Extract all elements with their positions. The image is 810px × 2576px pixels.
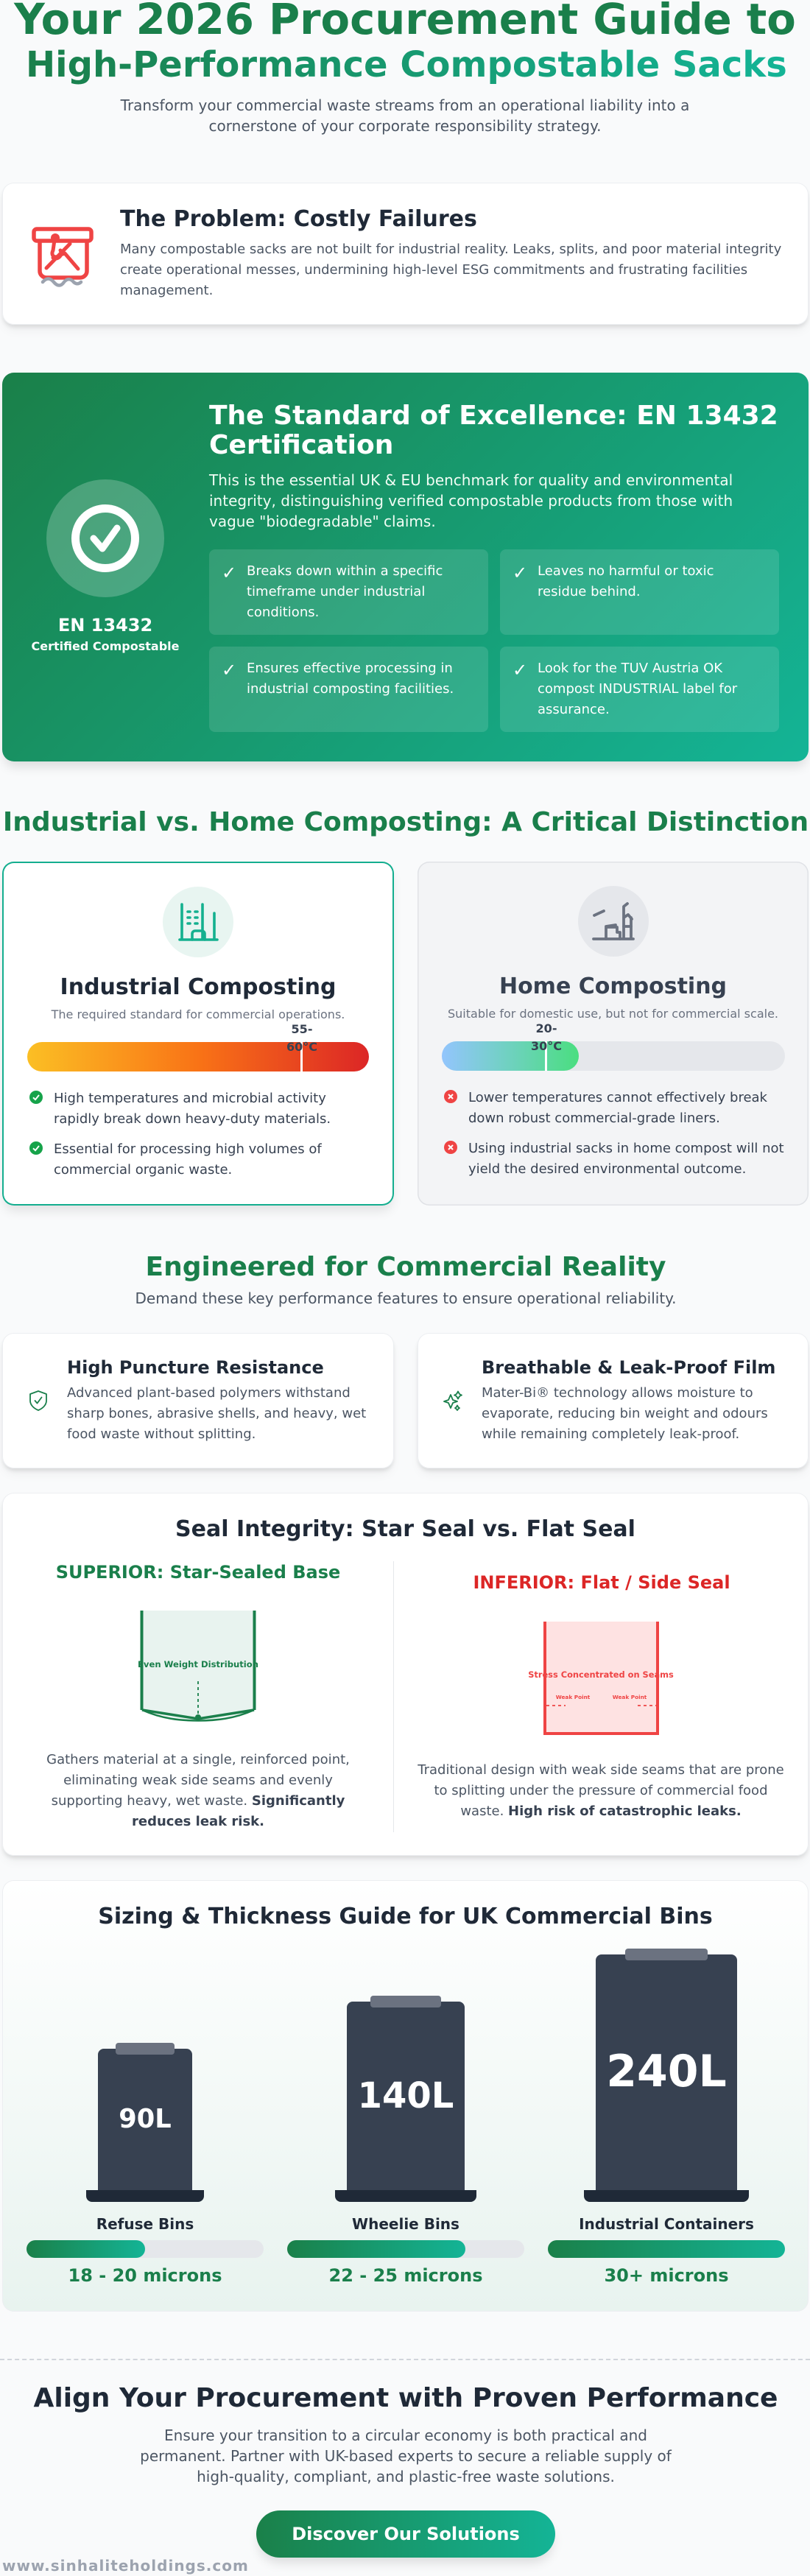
closing text: permanent. Partner with UK-based experts to secure a reliable supply of	[140, 2447, 672, 2465]
heading	[209, 401, 778, 460]
benefit 2: Leaves no harmful or toxic	[538, 563, 714, 579]
benefit 1: ✓	[222, 563, 236, 583]
volume: 140L	[358, 2075, 454, 2116]
column: 90L	[27, 2043, 264, 2286]
closing text	[140, 2427, 672, 2485]
benefit 3: Ensures effective processing in	[247, 661, 453, 676]
thickness bar	[548, 2240, 785, 2258]
thickness bar	[27, 2240, 264, 2258]
benefit 3: industrial composting facilities.	[247, 681, 454, 697]
call to action button: Discover Our Solutions	[292, 2524, 520, 2544]
temperature label: 20-	[536, 1021, 557, 1035]
icon: check	[29, 1091, 43, 1104]
diagram: star-sealed bag: Even Weight Distribution	[138, 1659, 258, 1669]
diagram: flat-sealed bag: Stress Concentrated on Seams	[528, 1669, 674, 1680]
icon: industrial building	[163, 887, 233, 957]
bin body	[347, 2002, 465, 2196]
bin body	[98, 2049, 192, 2196]
icon: check	[29, 1141, 43, 1155]
body text: evaporate, reducing bin weight and odours	[482, 1406, 768, 1421]
superior description	[46, 1752, 350, 1829]
benefit 1	[209, 549, 488, 635]
diagram: flat-sealed bag	[528, 1622, 674, 1735]
benefit 4: assurance.	[538, 702, 610, 717]
diagram: flat-sealed bag: Weak Point	[556, 1694, 591, 1700]
column: 140L	[287, 1996, 524, 2286]
inferior description: to splitting under the pressure of commercial food	[434, 1783, 767, 1798]
heading: The Problem: Costly Failures	[120, 206, 477, 232]
panel: home composting	[418, 862, 809, 1206]
inferior description: waste. High risk of catastrophic leaks.	[460, 1803, 742, 1819]
bin type: Refuse Bins	[96, 2215, 194, 2233]
benefit 2: ✓	[513, 563, 527, 583]
point 2: commercial organic waste.	[54, 1162, 232, 1178]
heading: Industrial Composting	[60, 974, 336, 1000]
panel: breathable film	[418, 1333, 809, 1468]
icon: sparkles	[443, 1390, 462, 1411]
heading: Certification	[209, 430, 393, 460]
bin base	[584, 2190, 749, 2202]
closing text: high-quality, compliant, and plastic-free waste solutions.	[197, 2468, 615, 2485]
body text: create operational messes, undermining high-level ESG commitments and frustrating facilities	[120, 262, 747, 278]
header	[13, 0, 796, 135]
bin lid	[116, 2043, 175, 2055]
point 2: yield the desired environmental outcome.	[468, 1161, 746, 1177]
benefit 1: Breaks down within a specific	[247, 563, 443, 579]
heading: Home Composting	[499, 974, 727, 999]
icon: certified badge	[46, 479, 164, 597]
title line 2: High-Performance Compostable Sacks	[26, 44, 787, 85]
bin base	[86, 2190, 204, 2202]
benefit 4: ✓	[513, 660, 527, 680]
point 2	[54, 1141, 323, 1178]
body text	[67, 1385, 366, 1442]
temperature label	[531, 1021, 562, 1053]
section subheading: Demand these key performance features to ensure operational reliability.	[135, 1289, 677, 1307]
point 1: down robust commercial-grade liners.	[468, 1111, 720, 1126]
description: integrity, distinguishing verified compostable products from those with	[209, 492, 733, 510]
diagram: star-sealed bag	[138, 1611, 258, 1722]
divider	[393, 1561, 394, 1832]
title: High Puncture Resistance	[67, 1357, 324, 1378]
temperature marker	[545, 1041, 547, 1071]
bin lid	[370, 1996, 441, 2007]
microns: 30+ microns	[604, 2265, 729, 2286]
section heading: engineered: Engineered for Commercial Reality	[146, 1252, 666, 1282]
badge label: EN 13432	[58, 615, 152, 636]
temperature label: 55-	[292, 1022, 312, 1036]
benefit 2	[500, 549, 779, 635]
bin body	[596, 1954, 737, 2196]
body text	[482, 1385, 768, 1442]
heading: Seal Integrity: Star Seal vs. Flat Seal	[175, 1516, 635, 1542]
benefit 1: timeframe under industrial	[247, 584, 425, 599]
thickness fill	[27, 2240, 145, 2258]
benefit 2: residue behind.	[538, 584, 641, 599]
icon: cross	[444, 1090, 457, 1103]
point 2: Essential for processing high volumes of	[54, 1141, 322, 1157]
temperature bar	[442, 1041, 785, 1071]
point 2	[468, 1141, 784, 1177]
benefit 4: compost INDUSTRIAL label for	[538, 681, 737, 697]
superior heading: SUPERIOR: Star-Sealed Base	[56, 1562, 340, 1583]
volume: 90L	[119, 2104, 172, 2134]
inferior description: Traditional design with weak side seams that are prone	[418, 1762, 784, 1778]
volume: 240L	[606, 2046, 727, 2097]
microns: 18 - 20 microns	[68, 2265, 222, 2286]
body text: food waste without splitting.	[67, 1426, 256, 1442]
closing heading: Align Your Procurement with Proven Performance	[34, 2383, 778, 2413]
body text: management.	[120, 283, 213, 298]
benefit 3	[209, 647, 488, 732]
temperature label	[286, 1022, 317, 1054]
icon: shield	[29, 1390, 47, 1411]
closing text: Ensure your transition to a circular economy is both practical and	[164, 2427, 647, 2444]
inferior heading: INFERIOR: Flat / Side Seal	[473, 1572, 730, 1593]
benefit 4	[500, 647, 779, 732]
icon: torn bin	[32, 227, 94, 287]
body text: Advanced plant-based polymers withstand	[67, 1385, 351, 1401]
temperature bar	[27, 1042, 369, 1071]
temperature label: 30°C	[531, 1039, 562, 1053]
call to action button	[256, 2510, 555, 2558]
bin base	[335, 2190, 476, 2202]
body text: while remaining completely leak-proof.	[482, 1426, 739, 1442]
panel: puncture resistance	[2, 1333, 394, 1468]
point 1: High temperatures and microbial activity	[54, 1091, 326, 1106]
subtitle	[121, 96, 689, 135]
temperature label: 60°C	[286, 1040, 317, 1054]
description	[209, 471, 733, 530]
website watermark: www.sinhaliteholdings.com	[2, 2557, 249, 2575]
body text	[120, 242, 781, 298]
column: 240L	[548, 1949, 785, 2286]
description: vague "biodegradable" claims.	[209, 513, 436, 530]
superior description: Gathers material at a single, reinforced point,	[46, 1752, 350, 1767]
icon: cross	[444, 1141, 457, 1154]
inferior description	[418, 1762, 784, 1819]
body text: Mater-Bi® technology allows moisture to	[482, 1385, 753, 1401]
section heading: industrial vs home: Industrial vs. Home Composting: A Critical Distinction	[3, 807, 809, 837]
body text: sharp bones, abrasive shells, and heavy, wet	[67, 1406, 366, 1421]
benefit 3: ✓	[222, 660, 236, 680]
body text: Many compostable sacks are not built for industrial reality. Leaks, splits, and poor material integrity	[120, 242, 781, 257]
title: Breathable & Leak-Proof Film	[482, 1357, 775, 1378]
heading: Sizing & Thickness Guide for UK Commercial Bins	[98, 1904, 713, 1929]
subtitle: cornerstone of your corporate responsibility strategy.	[209, 117, 601, 135]
point 1	[468, 1090, 767, 1126]
panel: industrial composting	[2, 862, 394, 1206]
point 1: rapidly break down heavy-duty materials.	[54, 1111, 331, 1127]
description: This is the essential UK & EU benchmark for quality and environmental	[209, 471, 733, 489]
temperature fill	[442, 1041, 579, 1071]
point 1	[54, 1091, 331, 1127]
subtitle: Transform your commercial waste streams from an operational liability into a	[121, 96, 689, 114]
bin lid	[625, 1949, 708, 1960]
thickness fill	[287, 2240, 465, 2258]
subheading: The required standard for commercial operations.	[52, 1007, 345, 1021]
panel: EN 13432 standard	[2, 373, 809, 761]
panel: sizing guide	[2, 1880, 809, 2312]
bin type: Industrial Containers	[579, 2215, 754, 2233]
benefit 4: Look for the TUV Austria OK	[538, 661, 722, 676]
icon: home compost	[578, 886, 649, 957]
temperature marker	[300, 1042, 303, 1071]
superior description: eliminating weak side seams and evenly	[63, 1773, 333, 1788]
benefit 1: conditions.	[247, 605, 319, 620]
superior description: reduces leak risk.	[132, 1814, 264, 1829]
bin type: Wheelie Bins	[352, 2215, 459, 2233]
point 2: Using industrial sacks in home compost will not	[468, 1141, 784, 1156]
diagram: flat-sealed bag: Weak Point	[613, 1694, 647, 1700]
subheading: Suitable for domestic use, but not for commercial scale.	[448, 1007, 778, 1021]
panel: the problem	[2, 183, 809, 325]
badge sublabel: Certified Compostable	[32, 639, 179, 653]
superior description: supporting heavy, wet waste. Significantly	[52, 1793, 345, 1809]
microns: 22 - 25 microns	[328, 2265, 482, 2286]
panel: seal integrity	[2, 1493, 809, 1856]
point 1: Lower temperatures cannot effectively break	[468, 1090, 767, 1105]
heading: The Standard of Excellence: EN 13432	[209, 401, 778, 431]
thickness bar	[287, 2240, 524, 2258]
